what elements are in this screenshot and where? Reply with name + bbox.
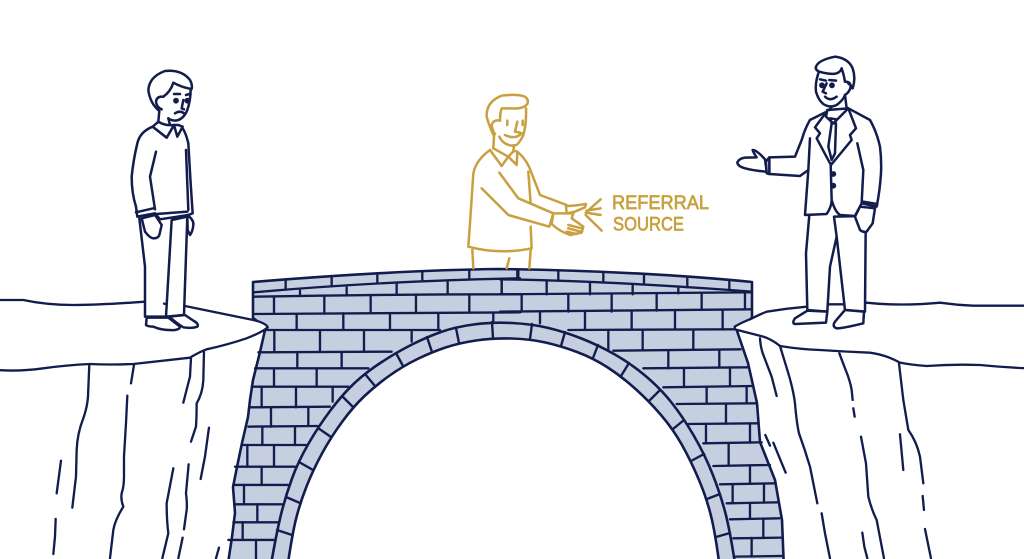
label: REFERRAL SOURCE: REFERRAL xyxy=(612,192,709,214)
face xyxy=(499,108,526,146)
sweater xyxy=(132,125,193,219)
forearm xyxy=(482,173,553,227)
collar xyxy=(153,122,183,138)
neck xyxy=(493,137,514,152)
left cliff plateau xyxy=(0,300,268,371)
lapels xyxy=(815,108,856,165)
right hand xyxy=(855,207,875,232)
figure: businessman on right cliff xyxy=(737,57,881,328)
arch voussoir ring xyxy=(270,323,736,559)
brick courses: right half xyxy=(500,270,783,557)
ear xyxy=(156,97,163,109)
neck xyxy=(158,111,170,125)
icon: burst rays pointing to hands xyxy=(586,199,602,231)
hair xyxy=(487,95,528,136)
label: REFERRAL SOURCE xyxy=(612,192,709,236)
arch opening xyxy=(287,338,720,559)
left cliff rock lines xyxy=(53,352,219,558)
brick courses: left half xyxy=(228,269,520,559)
trousers xyxy=(139,217,187,317)
label: REFERRAL SOURCE: SOURCE xyxy=(613,214,684,236)
collar xyxy=(490,148,517,166)
ear xyxy=(492,120,500,134)
jacket xyxy=(769,108,881,216)
buttons xyxy=(832,172,835,187)
shirt and necktie xyxy=(826,108,848,160)
legs xyxy=(472,250,531,268)
panel: stone bridge xyxy=(227,269,784,559)
face xyxy=(816,73,845,106)
neck xyxy=(829,95,847,110)
suit trousers xyxy=(806,215,866,312)
bridge silhouette xyxy=(227,269,784,559)
right cliff rock lines xyxy=(760,338,931,558)
panel: left cliff xyxy=(0,300,268,558)
hands xyxy=(142,215,193,238)
figure: worried man on left cliff xyxy=(132,71,198,330)
torso xyxy=(468,150,567,251)
arch stone joints xyxy=(277,322,730,537)
sweater details xyxy=(136,150,188,214)
panel: right cliff xyxy=(735,303,1024,558)
left open hand xyxy=(737,150,769,174)
figure: referral source in gold xyxy=(468,95,602,268)
ear xyxy=(845,82,851,95)
hands xyxy=(566,204,586,213)
hair xyxy=(148,71,192,111)
right cliff plateau xyxy=(735,303,1024,368)
dress shoes xyxy=(793,310,864,328)
hair xyxy=(816,57,854,88)
shoes xyxy=(146,315,198,330)
face xyxy=(168,89,191,121)
